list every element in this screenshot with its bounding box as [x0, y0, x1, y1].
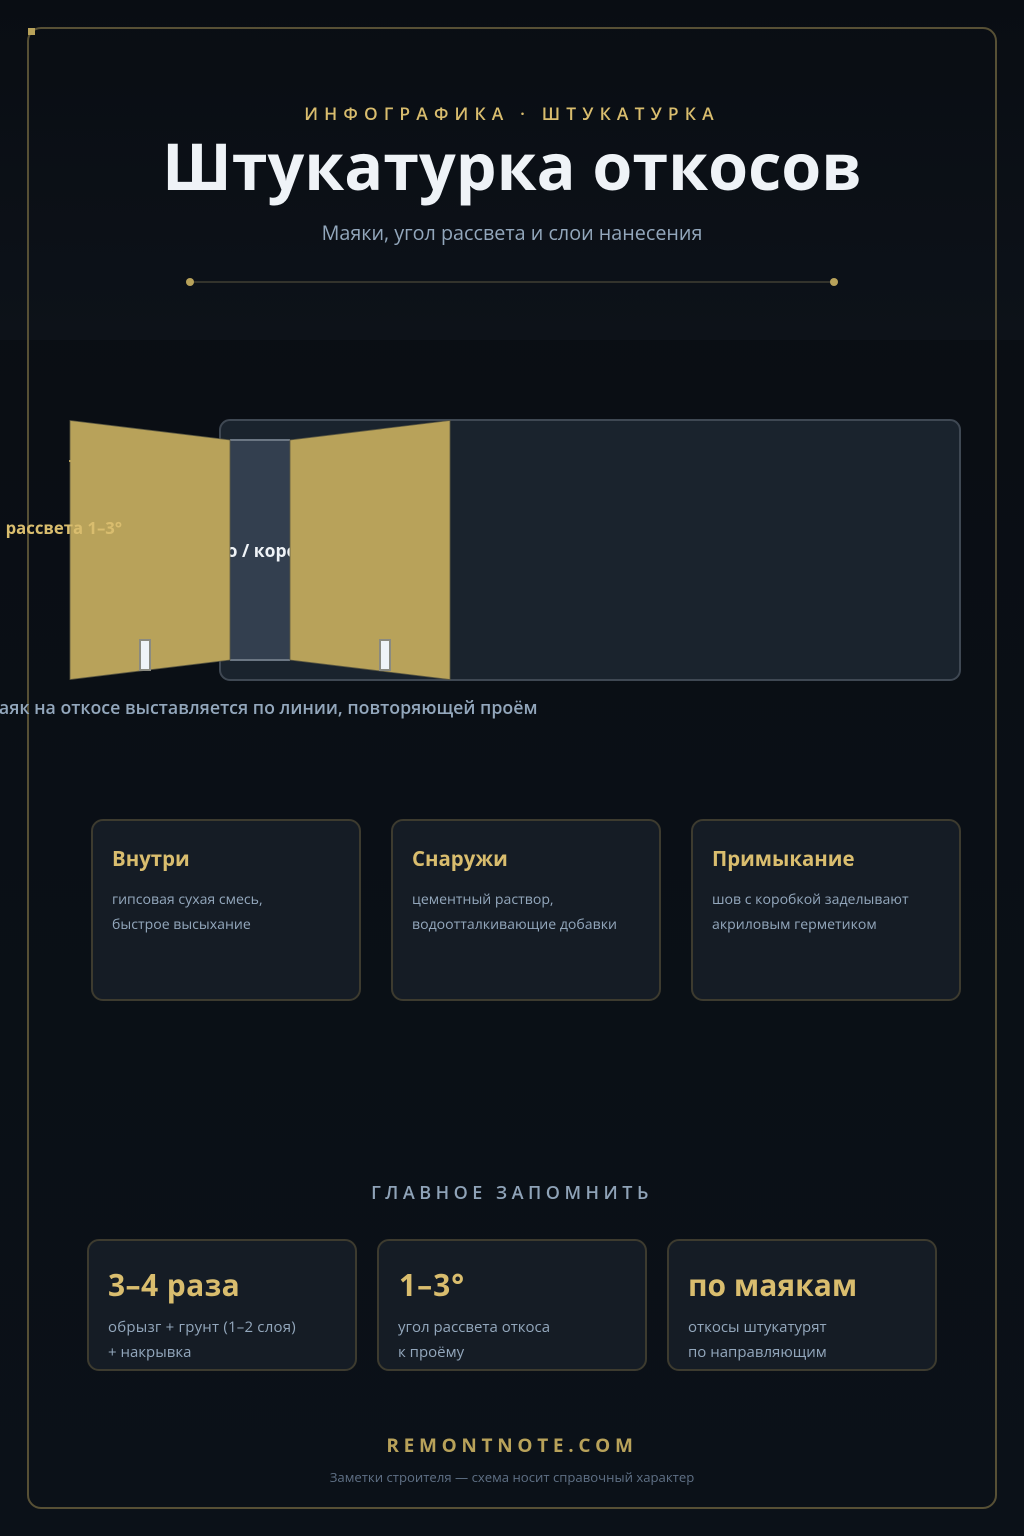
- card: inside: быстрое высыхание: [112, 915, 251, 934]
- card: inside: Внутри: [112, 844, 190, 872]
- opening / frame: Окно / коробка: [190, 539, 330, 563]
- left beacon: [140, 640, 150, 670]
- footer brand: REMONTNOTE.COM: [386, 1432, 638, 1458]
- opening / frame: [190, 440, 330, 660]
- card: outside: водоотталкивающие добавки: [412, 915, 617, 934]
- stat: angle: угол рассвета откоса: [398, 1317, 550, 1337]
- card: junction: шов с коробкой заделывают: [712, 890, 909, 909]
- stat: layers: [87, 1239, 357, 1371]
- card: inside: гипсовая сухая смесь,: [112, 890, 263, 909]
- card: junction: [691, 819, 961, 1001]
- frame corner marker: [28, 28, 35, 35]
- stat: beacons: откосы штукатурят: [688, 1317, 827, 1337]
- right beacon: [380, 640, 390, 670]
- wall panel: [220, 420, 960, 680]
- diagram: window reveal plan: [0, 419, 961, 720]
- tick mark: [69, 460, 71, 462]
- section heading: ГЛАВНОЕ ЗАПОМНИТЬ: [371, 1181, 653, 1205]
- header background: [0, 0, 1024, 340]
- stat: beacons: [667, 1239, 937, 1371]
- stat: beacons: по маякам: [688, 1264, 857, 1305]
- stat: layers: 3–4 раза: [108, 1264, 240, 1305]
- stat: angle: 1–3°: [399, 1264, 465, 1305]
- stat: angle: к проёму: [398, 1342, 464, 1362]
- card: outside: цементный раствор,: [412, 890, 554, 909]
- eyebrow label: ИНФОГРАФИКА · ШТУКАТУРКА: [304, 102, 720, 126]
- left reveal: [70, 420, 230, 680]
- stat: angle: [377, 1239, 647, 1371]
- subtitle: Маяки, угол рассвета и слои нанесения: [322, 219, 702, 246]
- card: inside: [91, 819, 361, 1001]
- header divider: [186, 278, 838, 286]
- card: junction: акриловым герметиком: [712, 915, 877, 934]
- card: outside: [391, 819, 661, 1001]
- card: outside: Снаружи: [412, 844, 508, 872]
- stat: layers: + накрывка: [108, 1342, 191, 1362]
- card: junction: Примыкание: [712, 844, 855, 872]
- stat: beacons: по направляющим: [688, 1342, 827, 1362]
- title: Штукатурка откосов: [162, 121, 862, 209]
- stat: layers: обрызг + грунт (1–2 слоя): [108, 1317, 296, 1337]
- right reveal: [290, 420, 450, 680]
- footer note: Заметки строителя — схема носит справочный характер: [330, 1468, 694, 1486]
